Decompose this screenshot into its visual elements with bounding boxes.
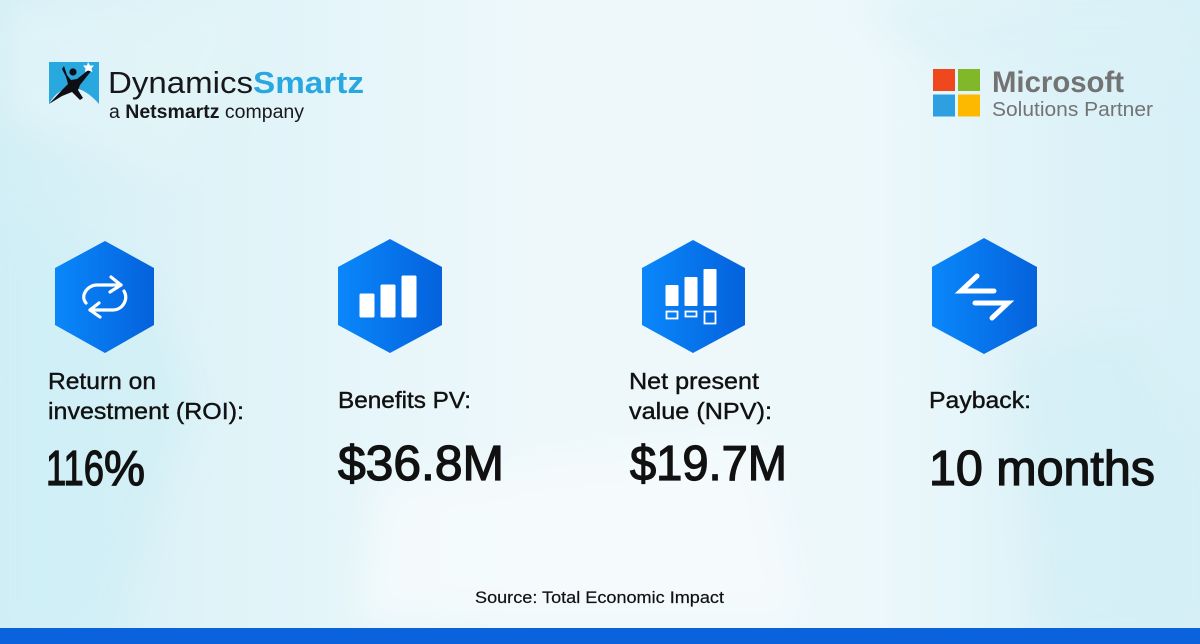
- logo: DynamicsSmartz: Smartz: [253, 65, 364, 100]
- value: $36.8M: [338, 437, 504, 491]
- Solutions Partner: Solutions Partner: [992, 99, 1153, 121]
- label: Benefits PV:: [338, 387, 471, 413]
- panel: NPV: [629, 240, 787, 491]
- label: Payback:: [929, 387, 1031, 413]
- icon: bars: [338, 239, 442, 353]
- panel: NPV: value (NPV):: [629, 398, 772, 424]
- footer bar: [0, 628, 1200, 644]
- value: 116: [46, 442, 104, 496]
- panel: ROI: investment (ROI):: [48, 398, 244, 424]
- panel: ROI: [46, 241, 244, 496]
- value: $19.7M: [630, 437, 787, 491]
- label: Return on: [48, 368, 156, 394]
- icon: logo figure: [49, 62, 99, 104]
- value: %: [104, 442, 145, 496]
- icon: bars with boxes: [642, 240, 745, 353]
- logo tagline: a Netsmartz company: [109, 102, 305, 123]
- logo wordmark: Dynamics: [108, 65, 253, 100]
- panel: Payback: [929, 238, 1155, 496]
- icon: cycle arrows: [55, 241, 154, 353]
- panel: Benefits PV: [338, 239, 504, 491]
- source note: Source: Total Economic Impact: [475, 588, 724, 607]
- Microsoft wordmark: Microsoft: [992, 66, 1124, 99]
- logo: DynamicsSmartz: [49, 62, 364, 123]
- value: 10 months: [929, 442, 1155, 496]
- icon: exchange arrows: [932, 238, 1037, 354]
- icon: Microsoft squares: [933, 69, 980, 116]
- label: Net present: [629, 368, 760, 394]
- logo: Microsoft Solutions Partner: [933, 66, 1153, 121]
